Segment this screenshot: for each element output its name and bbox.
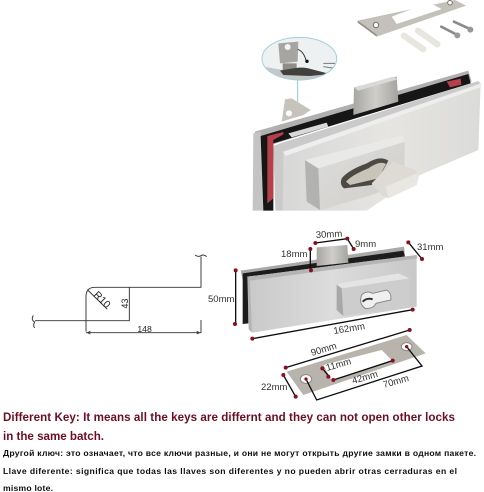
dimension lines: [236, 239, 422, 400]
description text: [3, 411, 476, 492]
black gasket and red pad: [261, 74, 471, 211]
Spanish description line 1: Llave diferente: significa que todas las llaves son diferentes y no pueden abrir otras cerraduras en el: [3, 466, 457, 476]
heading: different key line 2: in the same batch.: [3, 430, 104, 443]
strike plate: [287, 335, 426, 395]
label: 43: 43: [120, 299, 130, 309]
label: R10: R10: [91, 290, 112, 311]
label: 11mm: 11mm: [325, 356, 353, 374]
heading: different key line 1: Different Key: It means all the keys are differnt and they can not open other locks: [3, 411, 455, 424]
product photo: glass door lock: [253, 0, 481, 211]
label: 18mm: 18mm: [281, 249, 307, 260]
lock body: [241, 245, 417, 333]
thumb-turn knob: [341, 158, 388, 188]
section profile drawing: [32, 255, 207, 334]
dimension dots: [233, 237, 424, 399]
dimension labels: [261, 229, 443, 393]
thumb-turn housing: [305, 135, 405, 210]
strike plate with screws and anchors: [358, 0, 473, 49]
label: 9mm: 9mm: [355, 239, 376, 250]
Russian description: Другой ключ: это означает, что все ключи разные, и они не могут открыть другие замки в одном пакете.: [3, 448, 476, 458]
top latch block: [353, 77, 398, 115]
pivot tab behind lock: [282, 98, 311, 122]
dimensioned lock front view: [233, 237, 426, 400]
label: 162mm: 162mm: [333, 321, 366, 337]
back plate of lock: [255, 71, 472, 150]
label: 42mm: 42mm: [351, 369, 379, 387]
label: 30mm: 30mm: [316, 229, 343, 241]
label: 70mm: 70mm: [382, 373, 410, 391]
label: 90mm: 90mm: [310, 341, 338, 359]
label: 31mm: 31mm: [417, 242, 443, 253]
front plate: [273, 81, 481, 211]
detail callout: key in circle: [260, 37, 340, 112]
label: 148: 148: [137, 324, 152, 334]
label: 22mm: 22mm: [261, 382, 287, 393]
label: 50mm: 50mm: [208, 294, 234, 305]
